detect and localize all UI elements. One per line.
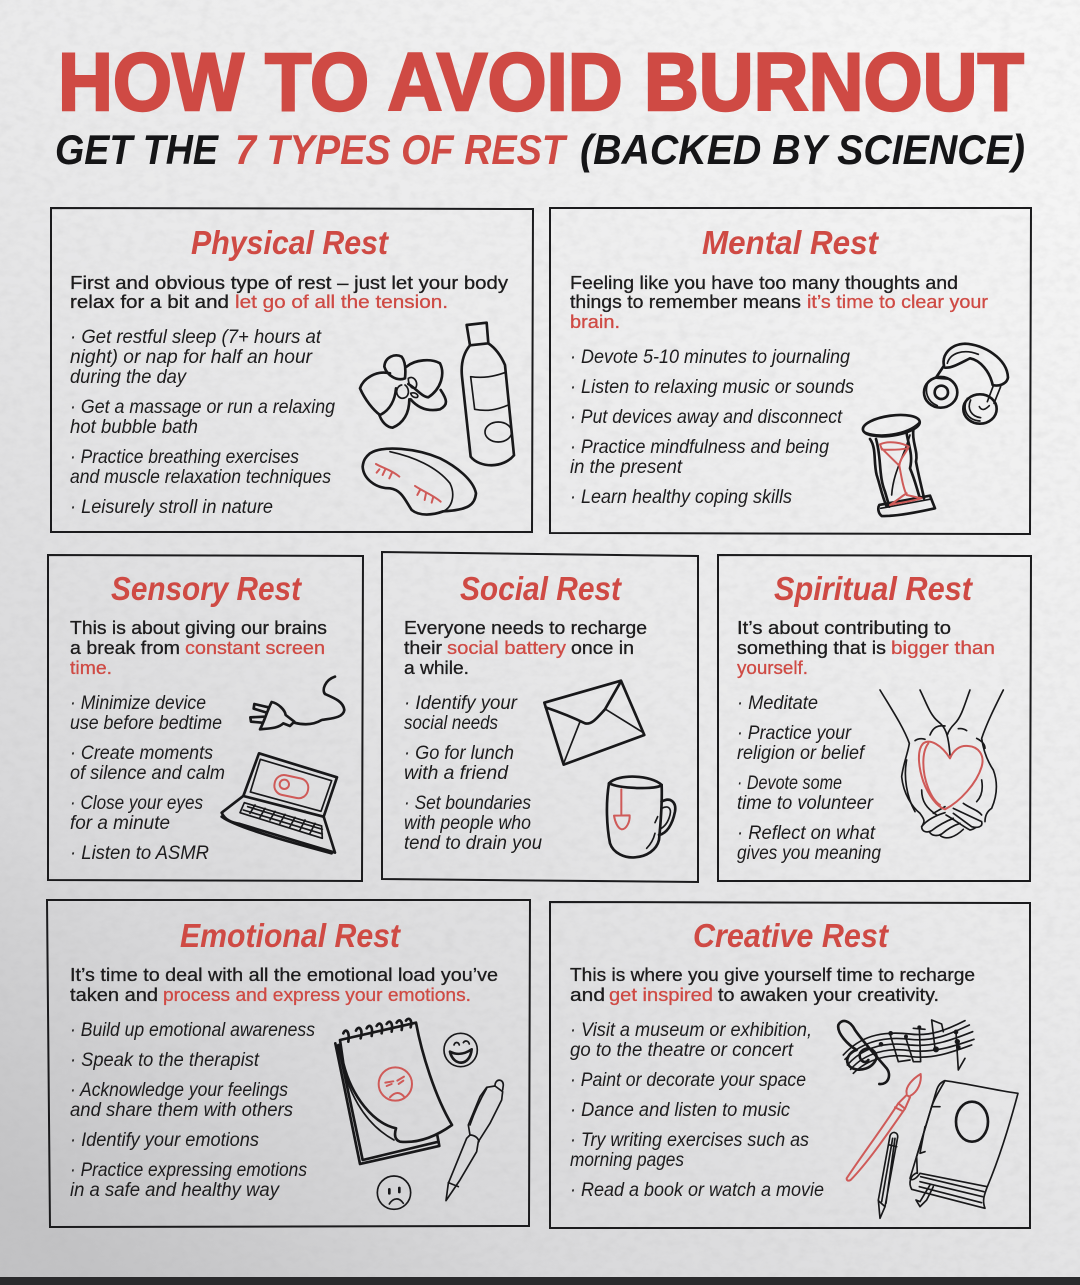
intro: mental rest: things to remember means bbox=[570, 291, 801, 312]
intro: mental rest: Feeling like you have too many thoughts and bbox=[570, 272, 958, 293]
list: spiritual rest: · Devote some bbox=[737, 773, 842, 794]
subtitle: GET THE bbox=[55, 126, 220, 173]
list: sensory rest bbox=[70, 693, 225, 864]
intro: emotional rest: It’s time to deal with all the emotional load you’ve bbox=[70, 964, 498, 985]
subtitle bbox=[55, 126, 1025, 173]
list: sensory rest: of silence and calm bbox=[70, 763, 225, 784]
list: spiritual rest: · Practice your bbox=[737, 723, 852, 744]
intro: emotional rest bbox=[70, 964, 498, 1005]
panel: sensory rest bbox=[48, 555, 363, 881]
intro: mental rest bbox=[570, 272, 988, 332]
list: creative rest: · Dance and listen to music bbox=[570, 1100, 790, 1121]
intro: physical rest: First and obvious type of rest – just let your body bbox=[70, 272, 509, 293]
intro: spiritual rest: yourself. bbox=[737, 657, 808, 678]
list: emotional rest: · Practice expressing emotions bbox=[70, 1160, 307, 1181]
intro: physical rest: relax for a bit and bbox=[70, 291, 229, 312]
list: physical rest: during the day bbox=[70, 367, 187, 388]
list: mental rest: · Listen to relaxing music or sounds bbox=[570, 377, 854, 398]
intro: spiritual rest bbox=[737, 617, 995, 678]
list: sensory rest: for a minute bbox=[70, 813, 170, 834]
list: spiritual rest: gives you meaning bbox=[737, 843, 881, 864]
subtitle: 7 TYPES OF REST bbox=[235, 126, 568, 173]
list: social rest: tend to drain you bbox=[404, 833, 542, 854]
list: creative rest bbox=[570, 1020, 824, 1201]
intro: physical rest: let go of all the tension. bbox=[235, 291, 448, 312]
list: creative rest: · Try writing exercises such as bbox=[570, 1130, 809, 1151]
panel: mental rest bbox=[550, 208, 1031, 534]
list: spiritual rest: religion or belief bbox=[737, 743, 866, 764]
intro: sensory rest bbox=[70, 617, 327, 678]
list: creative rest: · Paint or decorate your space bbox=[570, 1070, 806, 1091]
list: social rest: with people who bbox=[404, 813, 531, 834]
list: emotional rest: in a safe and healthy way bbox=[70, 1180, 280, 1201]
list: social rest: social needs bbox=[404, 713, 498, 734]
list: physical rest: · Leisurely stroll in nature bbox=[70, 497, 273, 518]
intro: mental rest: it’s time to clear your bbox=[807, 291, 988, 312]
intro: mental rest: brain. bbox=[570, 311, 620, 332]
intro: social rest: Everyone needs to recharge bbox=[404, 617, 647, 638]
list: social rest: · Identify your bbox=[404, 693, 518, 714]
list: spiritual rest: · Reflect on what bbox=[737, 823, 876, 844]
list: creative rest: go to the theatre or concert bbox=[570, 1040, 794, 1061]
intro: emotional rest: process and express your emotions. bbox=[163, 984, 471, 1005]
list: emotional rest: and share them with others bbox=[70, 1100, 293, 1121]
heading: spiritual rest: Spiritual Rest bbox=[774, 570, 974, 607]
list: mental rest: · Learn healthy coping skills bbox=[570, 487, 792, 508]
list: mental rest: · Devote 5-10 minutes to journaling bbox=[570, 347, 850, 368]
intro: social rest bbox=[404, 617, 647, 678]
intro: sensory rest: This is about giving our brains bbox=[70, 617, 327, 638]
list: sensory rest: use before bedtime bbox=[70, 713, 222, 734]
heading: creative rest: Creative Rest bbox=[693, 917, 890, 954]
list: physical rest: hot bubble bath bbox=[70, 417, 198, 438]
heading: sensory rest: Sensory Rest bbox=[111, 570, 303, 607]
list: spiritual rest: · Meditate bbox=[737, 693, 818, 714]
list: mental rest: in the present bbox=[570, 457, 683, 478]
intro: social rest: social battery bbox=[447, 637, 567, 658]
list: social rest: with a friend bbox=[404, 763, 509, 784]
panel: social rest bbox=[382, 552, 698, 882]
subtitle: (BACKED BY SCIENCE) bbox=[580, 126, 1025, 173]
heading: mental rest: Mental Rest bbox=[702, 224, 880, 261]
list: mental rest bbox=[570, 347, 854, 508]
intro: spiritual rest: bigger than bbox=[891, 637, 995, 658]
panel: physical rest bbox=[51, 208, 533, 532]
panel: spiritual rest bbox=[718, 555, 1031, 881]
intro: creative rest: to awaken your creativity. bbox=[718, 984, 939, 1005]
intro: emotional rest: taken and bbox=[70, 984, 158, 1005]
heading: emotional rest: Emotional Rest bbox=[180, 917, 402, 954]
icon: hands holding heart bbox=[880, 690, 1003, 838]
intro: sensory rest: constant screen bbox=[185, 637, 325, 658]
list: emotional rest bbox=[70, 1020, 315, 1201]
list: sensory rest: · Listen to ASMR bbox=[70, 843, 209, 864]
icon: music notes, brush, pencil, book bbox=[838, 1020, 1018, 1218]
list: social rest: · Set boundaries bbox=[404, 793, 531, 814]
icon: notepad, pen and faces bbox=[335, 1019, 503, 1209]
list: physical rest: night) or nap for half an hour bbox=[70, 347, 313, 368]
list: social rest: · Go for lunch bbox=[404, 743, 514, 764]
icon: headphones and hourglass bbox=[862, 344, 1008, 516]
intro: creative rest: This is where you give yourself time to recharge bbox=[570, 964, 975, 985]
list: mental rest: · Practice mindfulness and being bbox=[570, 437, 829, 458]
list: emotional rest: · Acknowledge your feelings bbox=[70, 1080, 288, 1101]
intro: physical rest bbox=[70, 272, 509, 312]
list: creative rest: morning pages bbox=[570, 1150, 684, 1171]
title: HOW TO AVOID BURNOUT bbox=[58, 37, 1024, 128]
icon: envelope and mug bbox=[544, 681, 675, 857]
list: creative rest: · Visit a museum or exhibition, bbox=[570, 1020, 812, 1041]
intro: creative rest bbox=[570, 964, 975, 1005]
list: emotional rest: · Build up emotional awareness bbox=[70, 1020, 315, 1041]
intro: social rest: their bbox=[404, 637, 442, 658]
list: emotional rest: · Identify your emotions bbox=[70, 1130, 259, 1151]
icon: plug and laptop bbox=[222, 677, 344, 853]
list: social rest bbox=[404, 693, 542, 854]
panel: emotional rest bbox=[47, 900, 530, 1227]
list: physical rest: · Practice breathing exercises bbox=[70, 447, 299, 468]
intro: spiritual rest: It’s about contributing to bbox=[737, 617, 951, 638]
intro: sensory rest: a break from bbox=[70, 637, 180, 658]
list: physical rest: · Get a massage or run a relaxing bbox=[70, 397, 335, 418]
list: spiritual rest: time to volunteer bbox=[737, 793, 874, 814]
list: physical rest: and muscle relaxation techniques bbox=[70, 467, 331, 488]
list: emotional rest: · Speak to the therapist bbox=[70, 1050, 260, 1071]
intro: creative rest: and bbox=[570, 984, 605, 1005]
icon: orchid, bottle, sleep mask bbox=[360, 323, 514, 515]
intro: creative rest: get inspired bbox=[609, 984, 713, 1005]
heading: social rest: Social Rest bbox=[460, 570, 623, 607]
intro: spiritual rest: something that is bbox=[737, 637, 886, 658]
list: sensory rest: · Minimize device bbox=[70, 693, 206, 714]
list: creative rest: · Read a book or watch a movie bbox=[570, 1180, 824, 1201]
intro: sensory rest: time. bbox=[70, 657, 112, 678]
panel: creative rest bbox=[550, 902, 1030, 1228]
intro: social rest: once in bbox=[571, 637, 634, 658]
list: spiritual rest bbox=[737, 693, 881, 864]
intro: social rest: a while. bbox=[404, 657, 469, 678]
list: physical rest: · Get restful sleep (7+ hours at bbox=[70, 327, 322, 348]
heading: physical rest: Physical Rest bbox=[191, 224, 390, 261]
list: mental rest: · Put devices away and disconnect bbox=[570, 407, 843, 428]
list: sensory rest: · Create moments bbox=[70, 743, 213, 764]
list: sensory rest: · Close your eyes bbox=[70, 793, 203, 814]
list: physical rest bbox=[70, 327, 335, 518]
